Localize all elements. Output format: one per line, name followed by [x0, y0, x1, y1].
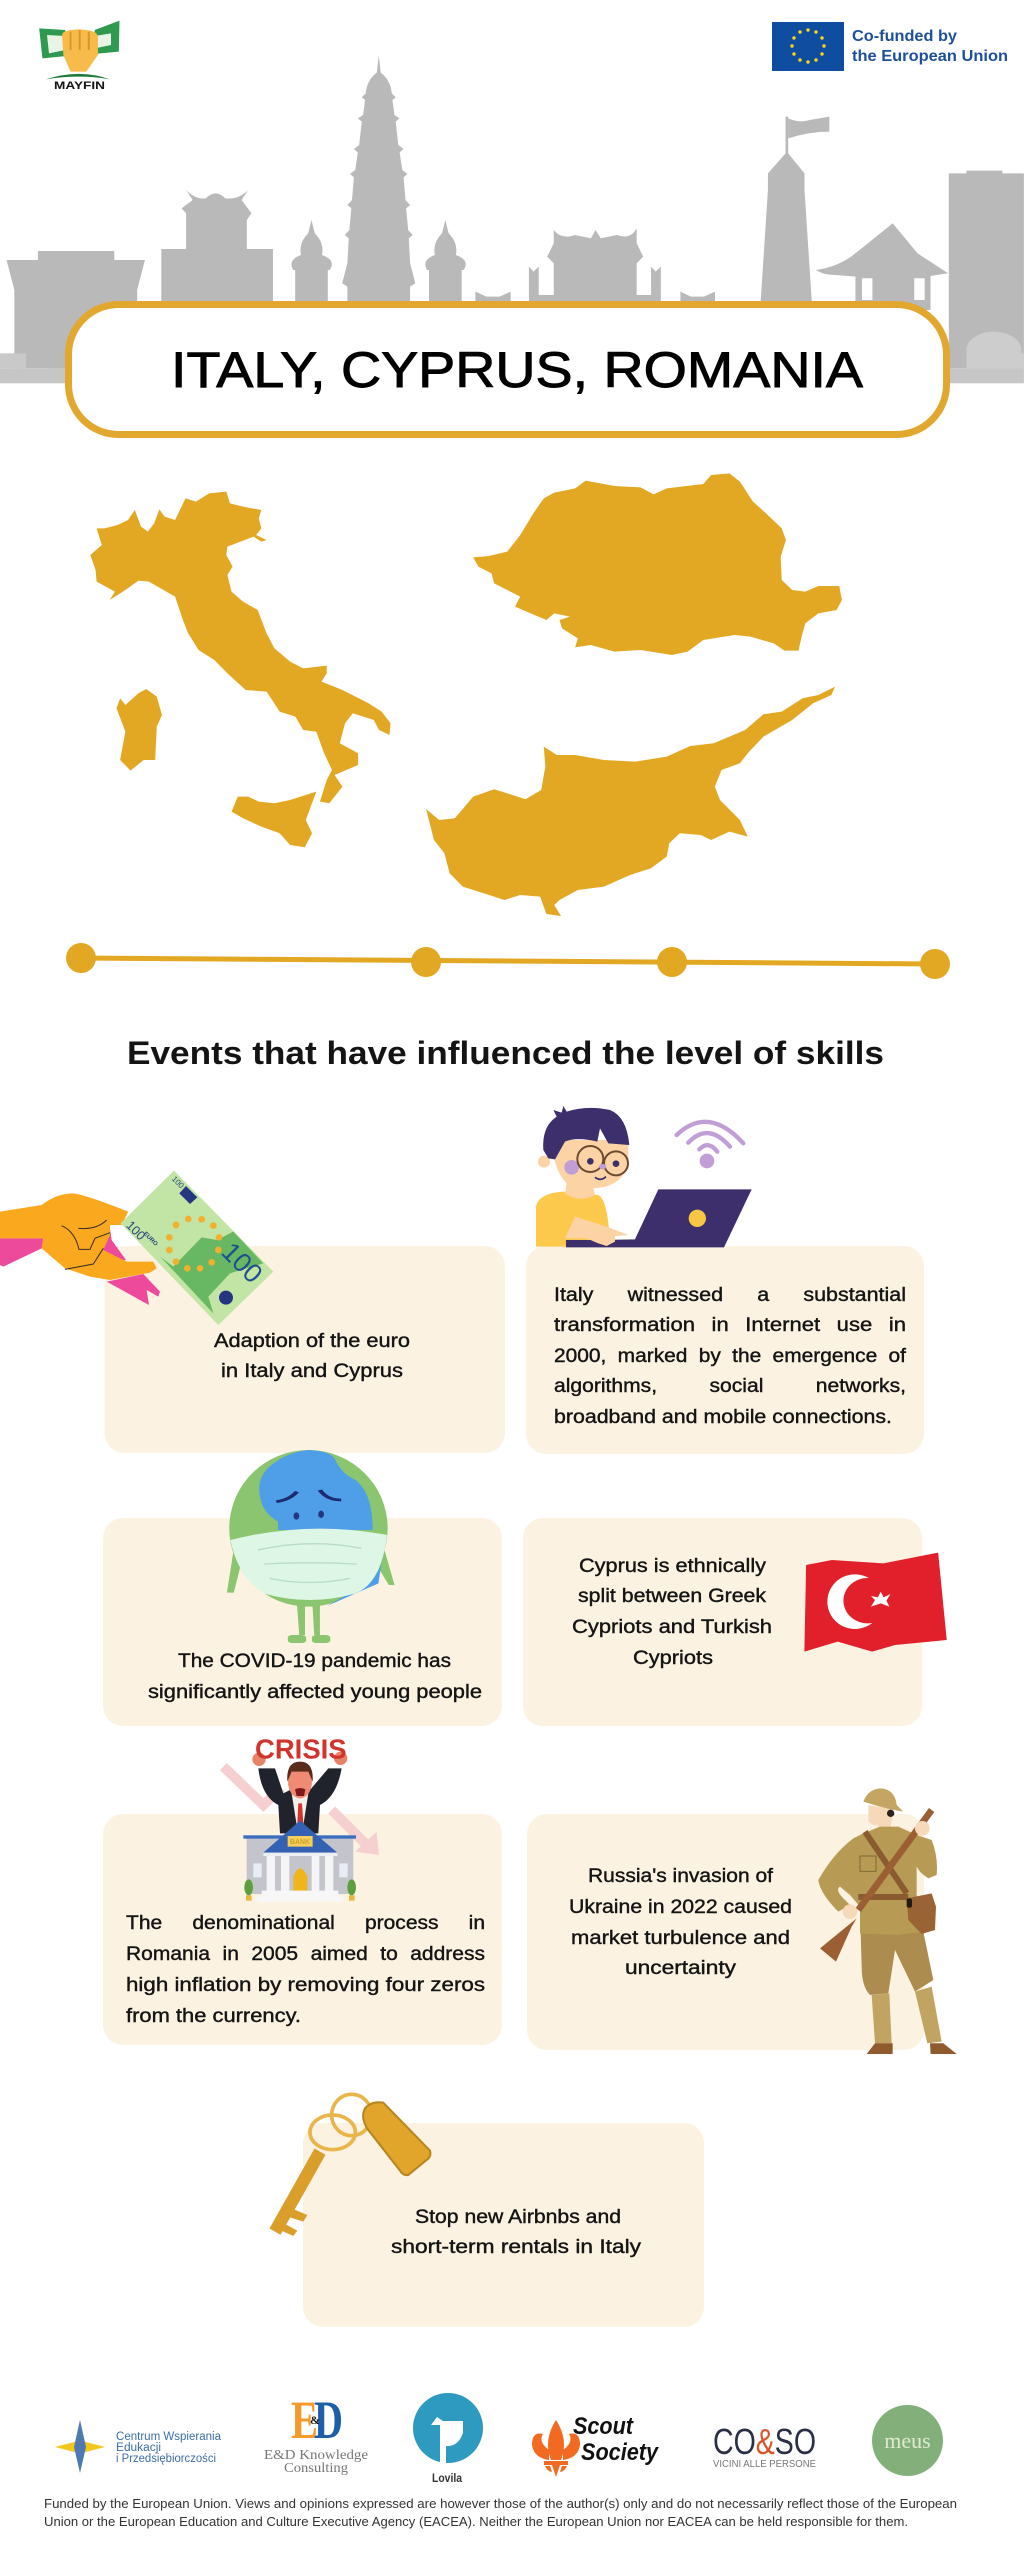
card: COVID-19: The COVID-19 pandemic has	[178, 1651, 451, 1672]
icon: boy at laptop with wifi	[536, 1106, 752, 1247]
logo: Centrum Wspierania: Centrum Wspierania	[116, 2431, 222, 2443]
skyline silhouette	[0, 55, 1024, 383]
card: Russia invasion: uncertainty	[625, 1958, 737, 1979]
card: Russia invasion: Ukraine in 2022 caused	[569, 1897, 792, 1918]
map: Cyprus	[426, 687, 835, 916]
logo: E&D Knowledge Consulting: &	[310, 2413, 320, 2427]
card: euro adoption	[104, 1246, 505, 1453]
icon: crisis banker on bank	[223, 1733, 379, 1902]
icon: key with tag	[275, 2094, 430, 2236]
card: Romanian denomination: high inflation by removing four zeros	[126, 1975, 485, 1996]
icon: globe wearing mask	[227, 1450, 395, 1643]
icon: hand with 100 euro note	[0, 1171, 273, 1325]
logo: Centrum Wspierania: Edukacji	[116, 2442, 161, 2454]
card: Cyprus split: Cyprus is ethnically	[579, 1556, 767, 1577]
logo: co-funded by the European Union: Co-funded by	[852, 28, 957, 45]
card: Cyprus split: Cypriots	[633, 1648, 713, 1669]
map: Italy	[90, 492, 391, 847]
card: Airbnb: Stop new Airbnbs and	[415, 2207, 621, 2228]
card: internet use in Italy: algorithms, social networks,	[554, 1376, 906, 1397]
icon: crisis banker on bank: BANK	[290, 1837, 311, 1846]
logo: CO&SO: CO&SO	[713, 2421, 816, 2462]
icon: crisis banker on bank: CRISIS	[255, 1733, 347, 1764]
logo: E&D Knowledge Consulting	[264, 2390, 368, 2476]
logo: E&D Knowledge Consulting: E	[291, 2390, 318, 2450]
icon: soldier with rifle	[818, 1788, 957, 2054]
logo: Scout Society: Scout	[573, 2413, 634, 2440]
card: internet use in Italy: transformation in Internet use in	[554, 1315, 906, 1336]
timeline with four dots	[66, 943, 950, 979]
card: Cyprus split: Cypriots and Turkish	[572, 1617, 772, 1638]
funding disclaimer	[44, 2496, 957, 2529]
card: Romanian denomination: The denominational process in	[126, 1913, 485, 1934]
section heading: Events that have influenced the level of skills	[127, 1035, 884, 1071]
logo: Centrum Wspierania: i Przedsiębiorczości	[116, 2453, 216, 2465]
card: Romanian denomination: Romania in 2005 aimed to address	[126, 1944, 485, 1965]
logo: MAYFIN: MAYFIN	[54, 80, 105, 92]
logo: co-funded by the European Union: the European Union	[852, 48, 1008, 65]
card: euro adoption: Adaption of the euro	[214, 1331, 410, 1352]
title banner: ITALY, CYPRUS, ROMANIA	[171, 342, 864, 398]
icon: Turkish flag	[804, 1553, 947, 1652]
card: euro adoption: in Italy and Cyprus	[221, 1361, 403, 1382]
card: COVID-19: significantly affected young people	[148, 1682, 482, 1703]
card: Airbnb: short-term rentals in Italy	[391, 2237, 642, 2258]
funding disclaimer: Funded by the European Union. Views and opinions expressed are however those of the author(s) only and do not necessarily reflect those of the European	[44, 2496, 957, 2511]
logo: meus: meus	[884, 2428, 931, 2453]
logo: E&D Knowledge Consulting: D	[314, 2390, 343, 2450]
icon: hand with 100 euro note: 100	[123, 1218, 148, 1243]
card: internet use in Italy: 2000, marked by the emergence of	[554, 1346, 907, 1367]
card: Cyprus split	[523, 1518, 922, 1726]
card: Airbnb	[303, 2123, 704, 2327]
logo: CO&SO: VICINI ALLE PERSONE	[713, 2458, 816, 2470]
logo: Centrum Wspierania	[55, 2420, 222, 2473]
card: internet use in Italy	[526, 1246, 924, 1454]
card: Russia invasion: Russia's invasion of	[588, 1866, 774, 1887]
icon: hand with 100 euro note: EURO	[142, 1231, 159, 1248]
funding disclaimer: Union or the European Education and Culture Executive Agency (EACEA). Neither the European Union nor EACEA can be held responsible for them.	[44, 2514, 908, 2529]
icon: hand with 100 euro note: 100	[216, 1236, 268, 1289]
card: COVID-19	[103, 1518, 502, 1726]
logo: MAYFIN	[39, 21, 119, 92]
card: Romanian denomination: from the currency.	[126, 2006, 301, 2027]
logo: E&D Knowledge Consulting: Consulting	[284, 2461, 348, 2476]
logo: co-funded by the European Union	[772, 22, 1008, 71]
card: Cyprus split: split between Greek	[578, 1586, 767, 1607]
card: Russia invasion	[527, 1814, 924, 2050]
card: internet use in Italy: broadband and mobile connections.	[554, 1407, 892, 1428]
card: internet use in Italy: Italy witnessed a substantial	[554, 1285, 906, 1306]
logo: E&D Knowledge Consulting: E&D Knowledge	[264, 2448, 368, 2463]
icon: hand with 100 euro note: 100	[170, 1174, 186, 1191]
logo: Lovila: Lovila	[432, 2471, 462, 2485]
logo: Scout Society	[532, 2413, 659, 2477]
map: Romania	[473, 473, 842, 655]
card: Russia invasion: market turbulence and	[571, 1928, 790, 1949]
card: Romanian denomination	[103, 1814, 502, 2045]
title banner	[68, 304, 946, 434]
logo: Scout Society: Society	[581, 2439, 659, 2466]
logo: Lovila	[413, 2393, 483, 2485]
logo: meus	[872, 2405, 943, 2476]
